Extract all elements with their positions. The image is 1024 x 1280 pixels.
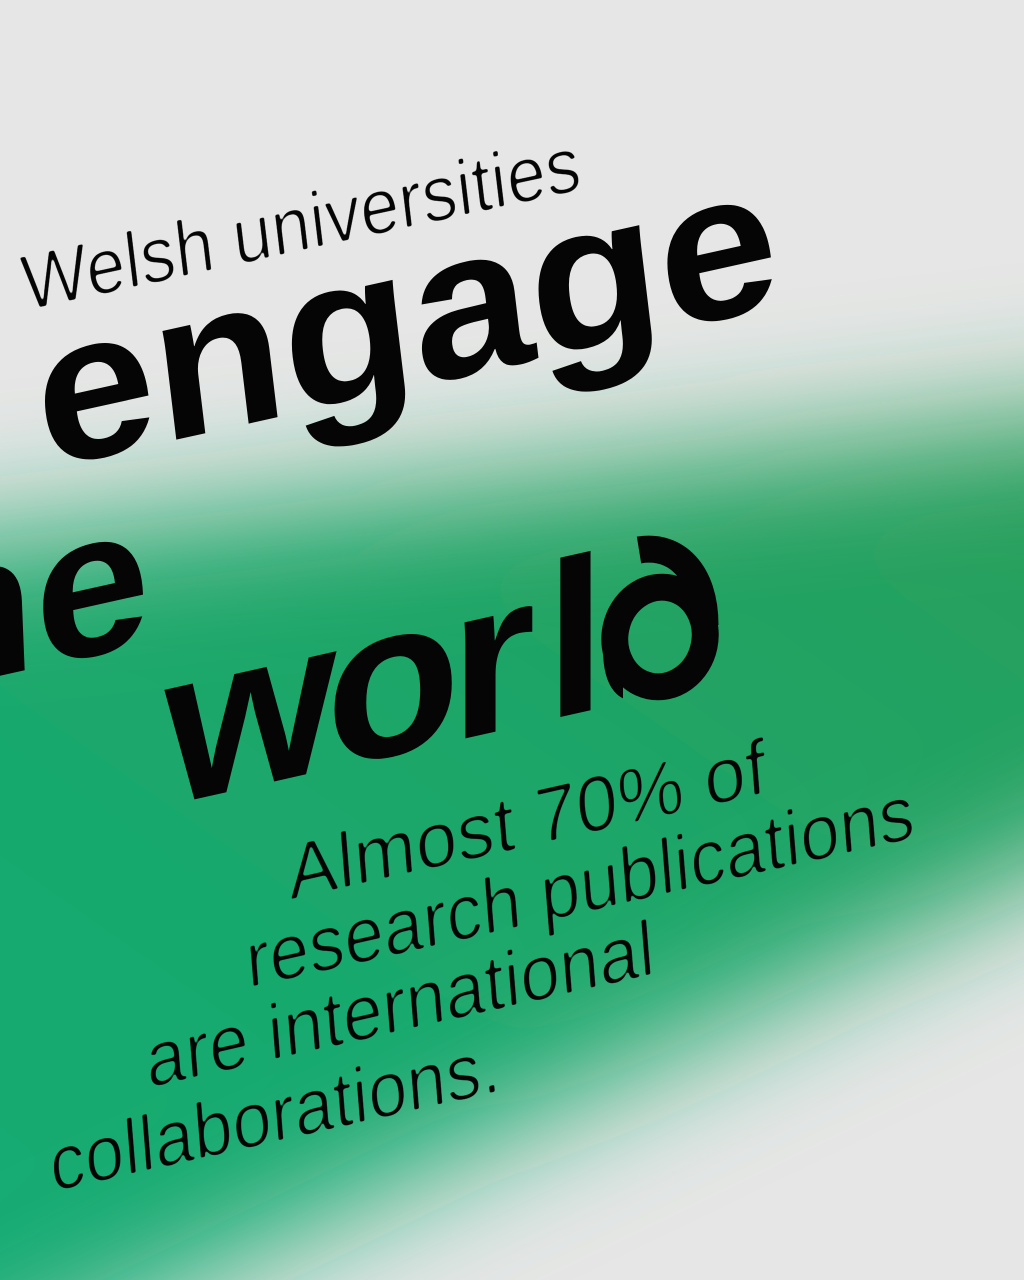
paragraph line 1: Almost 70% of — [284, 721, 770, 917]
paragraph line 2: research publications — [242, 767, 917, 1005]
intro line: Welsh universities: Welsh universities — [16, 118, 585, 328]
body paragraph — [46, 721, 917, 1209]
heading word: world — [164, 536, 719, 800]
heading word: engage: engage — [22, 120, 789, 513]
paragraph line 4: collaborations. — [46, 1020, 503, 1209]
green gradient band — [0, 385, 1024, 1280]
paragraph line 3: are international — [142, 903, 657, 1105]
heading word: world: world — [164, 481, 728, 854]
